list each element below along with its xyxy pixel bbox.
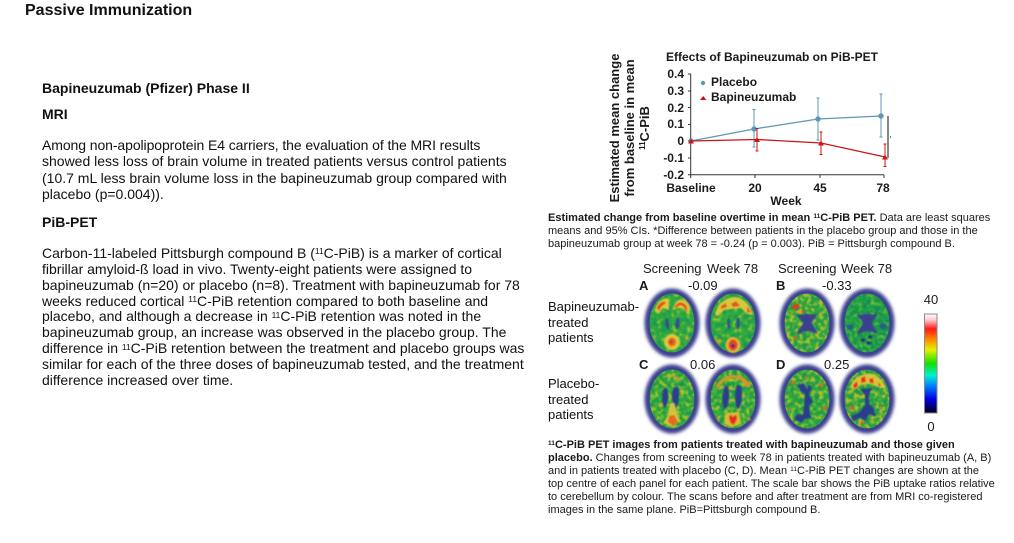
x-axis tick labels: 78	[876, 181, 890, 195]
panel labels and mean changes: C	[639, 357, 649, 372]
text block: MRI results: placebo (p=0.004)).	[42, 186, 164, 202]
panel labels and mean changes: D	[776, 357, 785, 372]
caption: PET images: placebo. Changes from screening to week 78 in patients treated with bapineuzumab (A, B)	[548, 452, 991, 464]
row label: bapineuzumab-treated patients: Bapineuzumab-	[548, 299, 639, 314]
caption: chart: bapineuzumab group at week 78 = -0.24 (p = 0.003). PiB = Pittsburgh compound B.	[548, 238, 955, 250]
screening and week 78 column headers	[643, 261, 892, 276]
caption: chart: means and 95% CIs. *Difference between patients in the placebo group and those in the	[548, 225, 978, 237]
caption: PET images: top centre of each panel for each patient. The scale bar shows the PiB uptake ratios relative	[548, 478, 995, 490]
heading: MRI: MRI	[42, 106, 68, 122]
bapineuzumab series	[688, 128, 888, 166]
y-axis title: Estimated mean change	[607, 54, 622, 202]
legend	[700, 75, 796, 104]
heading: Bapineuzumab phase II: Bapineuzumab (Pfizer) Phase II	[42, 80, 250, 96]
y-axis tick labels: 0.1	[667, 117, 684, 131]
colour scale bar	[924, 292, 938, 434]
caption: PET images: to cerebellum by colour. The scans before and after treatment are from MRI co-registered	[548, 491, 982, 503]
row label: placebo-treated patients: Placebo-	[548, 376, 599, 391]
row label: bapineuzumab-treated patients: patients	[548, 330, 594, 345]
x-axis tick labels: Baseline	[666, 181, 716, 195]
brain scan: B week 78	[840, 288, 894, 358]
placebo series	[689, 94, 883, 147]
brain scan: A week 78	[706, 288, 760, 358]
text block: PiB-PET results: bapineuzumab group, an increase was observed in the placebo group. The	[42, 324, 506, 340]
significance bracket	[888, 116, 891, 158]
text block: PiB-PET results: fibrillar amyloid-ß load in vivo. Twenty-eight patients were assigned to	[42, 261, 472, 277]
y-axis title: C-PiB	[637, 106, 652, 141]
caption: chart: Estimated change from baseline overtime in mean 11C-PiB PET. Data are least squares	[548, 212, 990, 224]
caption: chart	[548, 212, 990, 250]
brain scan: A screening	[644, 288, 700, 358]
brain scan: B screening	[780, 288, 834, 358]
heading: PiB-PET: PiB-PET	[42, 214, 97, 230]
text block: MRI results	[42, 137, 507, 202]
row label: placebo-treated patients	[548, 376, 599, 422]
chart title: Effects of Bapineuzumab on PiB-PET	[666, 50, 879, 64]
y-axis title	[607, 54, 652, 202]
title: Passive Immunization	[25, 2, 192, 19]
text block: PiB-PET results: difference increased over time.	[42, 372, 233, 388]
screening and week 78 column headers: Screening	[643, 261, 702, 276]
text block: PiB-PET results: Carbon-11-labeled Pittsburgh compound B (11C-PiB) is a marker of cortical	[42, 245, 502, 261]
row label: placebo-treated patients: patients	[548, 407, 594, 422]
panel labels and mean changes: -0.09	[688, 278, 718, 293]
text block: PiB-PET results: bapineuzumab (n=20) or placebo (n=8). Treatment with bapineuzumab for 78	[42, 277, 520, 293]
caption: PET images: images in the same plane. PiB=Pittsburgh compound B.	[548, 504, 820, 516]
axes	[688, 74, 884, 178]
screening and week 78 column headers: Week 78	[841, 261, 892, 276]
brain scan: C screening	[644, 364, 700, 434]
row label: placebo-treated patients: treated	[548, 392, 588, 406]
y-axis tick labels: 0.2	[667, 101, 684, 115]
panel labels and mean changes: -0.33	[822, 278, 852, 293]
text block: MRI results: (10.7 mL less brain volume loss in the bapineuzumab group compared with	[42, 170, 507, 186]
caption: PET images	[548, 439, 995, 516]
y-axis title: from baseline in mean	[622, 59, 637, 197]
brain scan: C week 78	[706, 364, 760, 434]
y-axis tick labels: 0	[677, 134, 684, 148]
text block: PiB-PET results: similar for each of the three doses of bapineuzumab tested, and the treatment	[42, 356, 524, 372]
text block: PiB-PET results: weeks reduced cortical 11C-PiB retention compared to both baseline and	[42, 293, 488, 309]
y-axis tick labels: -0.2	[663, 168, 684, 182]
colour scale bar: 40	[924, 292, 938, 307]
y-axis title: 11	[638, 141, 647, 150]
text block: PiB-PET results	[42, 245, 524, 388]
panel labels and mean changes: 0.06	[690, 357, 715, 372]
x-axis tick labels	[666, 181, 890, 208]
x-axis tick labels: 20	[748, 181, 762, 195]
colour scale bar: 0	[927, 419, 935, 434]
x-axis tick labels: 45	[813, 181, 827, 195]
brain scan: D week 78	[840, 364, 894, 434]
panel labels and mean changes: A	[639, 278, 649, 293]
y-axis tick labels: 0.3	[667, 84, 684, 98]
row label: bapineuzumab-treated patients	[548, 299, 639, 345]
panel labels and mean changes: 0.25	[824, 357, 849, 372]
panel labels and mean changes: B	[776, 278, 785, 293]
row label: bapineuzumab-treated patients: treated	[548, 314, 588, 330]
panel labels and mean changes	[639, 278, 852, 372]
brain scan: D screening	[780, 364, 834, 434]
text block: PiB-PET results: placebo, and although a decrease in 11C-PiB retention was noted in the	[42, 308, 481, 324]
caption: PET images: and in patients treated with placebo (C, D). Mean 11C-PiB PET changes are shown at the	[548, 465, 979, 477]
x-axis tick labels: Week	[770, 194, 802, 208]
legend: Bapineuzumab	[711, 90, 796, 104]
text block: MRI results: showed less loss of brain volume in treated patients versus control patients	[42, 153, 507, 169]
screening and week 78 column headers: Screening	[778, 261, 837, 276]
text block: MRI results: Among non-apolipoprotein E4 carriers, the evaluation of the MRI results	[42, 137, 480, 153]
text block: PiB-PET results: difference in 11C-PiB retention between the treatment and placebo groups was	[42, 340, 524, 356]
y-axis tick labels	[663, 67, 684, 182]
legend: Placebo	[711, 75, 757, 89]
screening and week 78 column headers: Week 78	[707, 261, 758, 276]
y-axis tick labels: -0.1	[663, 151, 684, 165]
y-axis tick labels: 0.4	[667, 67, 684, 81]
caption: PET images: 11C-PiB PET images from patients treated with bapineuzumab and those given	[548, 439, 955, 451]
